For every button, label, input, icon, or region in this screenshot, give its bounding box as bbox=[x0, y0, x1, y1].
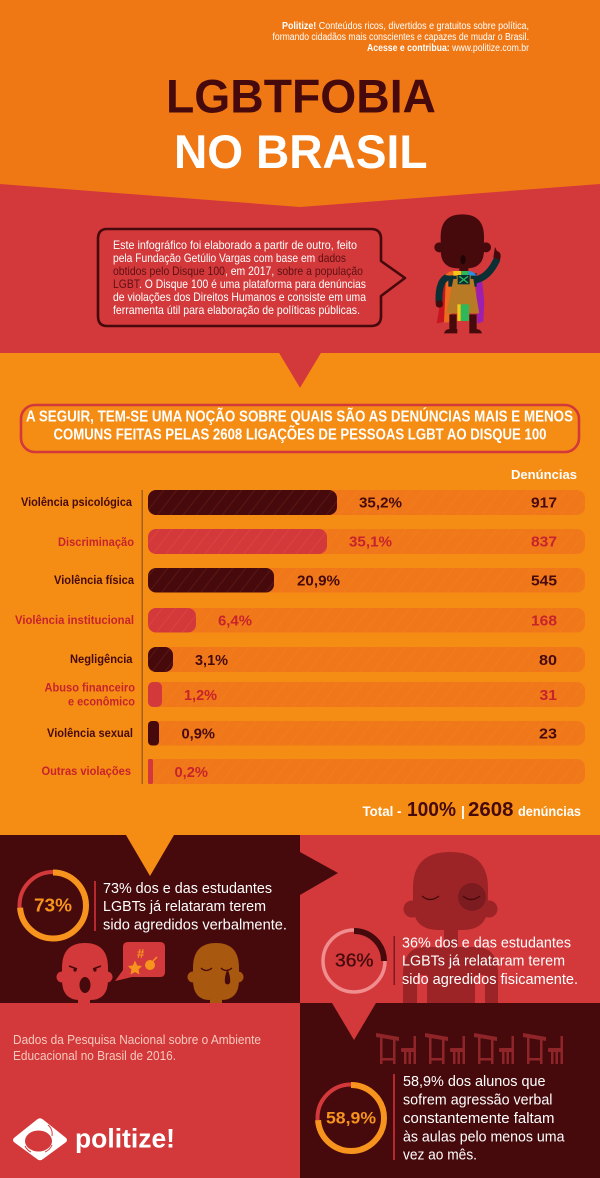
panel: complaints section background bbox=[0, 353, 600, 835]
text: data source: Dados da Pesquisa Nacional sobre o Ambiente bbox=[13, 1032, 261, 1047]
icon: insult speech bubble: # bbox=[137, 946, 145, 961]
donut: 36%: 36% bbox=[335, 950, 374, 970]
callout: intro speech bubble: pela Fundação Getúlio Vargas com base em dados bbox=[113, 251, 346, 265]
row: Violência sexual bbox=[47, 721, 585, 746]
row: Violência física bbox=[54, 568, 585, 592]
title bbox=[166, 70, 436, 178]
total line: 100% bbox=[407, 799, 456, 821]
text: verbal aggression statistic: sido agredidos verbalmente. bbox=[103, 916, 287, 934]
row: Negligência bbox=[70, 647, 585, 672]
panel: physical aggression bbox=[300, 835, 600, 1003]
row: Negligência: 3,1% bbox=[195, 652, 228, 669]
panel: publisher note: formando cidadãos mais conscientes e capazes de mudar o Brasil. bbox=[272, 32, 529, 43]
row: Violência psicológica bbox=[21, 490, 585, 515]
total line: Total - bbox=[362, 803, 402, 819]
text: school absence statistic: constantemente faltam bbox=[403, 1110, 554, 1127]
callout: intro speech bubble: de violações dos Direitos Humanos e consiste em uma bbox=[113, 290, 366, 304]
row: Violência física: 20,9% bbox=[297, 572, 340, 590]
row: Discriminação: Discriminação bbox=[58, 535, 134, 549]
row: Abuso financeiro e econômico: e econômico bbox=[68, 694, 135, 708]
callout: intro speech bubble bbox=[98, 229, 405, 326]
callout: intro speech bubble: ferramenta útil para elaboração de políticas públicas. bbox=[113, 303, 360, 317]
donut: 73%: 73% bbox=[34, 896, 72, 916]
title: NO BRASIL bbox=[174, 125, 428, 178]
row: Discriminação bbox=[58, 529, 585, 554]
row: Discriminação: 837 bbox=[531, 534, 557, 550]
callout: intro speech bubble: Este infográfico foi elaborado a partir de outro, feito bbox=[113, 238, 357, 252]
row: Violência psicológica: 35,2% bbox=[359, 494, 402, 512]
row: Violência institucional: 168 bbox=[531, 612, 557, 630]
panel: introduction bbox=[0, 184, 600, 388]
icon: shouting red face bbox=[56, 943, 112, 1003]
text: data source bbox=[13, 1032, 261, 1063]
donut: 58,9%: 58,9% bbox=[326, 1108, 376, 1128]
row: Negligência: Negligência bbox=[70, 652, 133, 666]
title: LGBTFOBIA bbox=[166, 70, 436, 122]
text: verbal aggression statistic bbox=[103, 880, 287, 934]
icon: politize logo bbox=[13, 1118, 175, 1160]
text: school absence statistic bbox=[403, 1073, 565, 1164]
donut: 36% bbox=[323, 930, 385, 992]
donut: 73% bbox=[20, 872, 86, 939]
panel: publisher note: Acesse e contribua: www.politize.com.br bbox=[367, 43, 530, 54]
panel: school absence bbox=[300, 1003, 600, 1178]
panel: publisher note: Politize! Conteúdos ricos, divertidos e gratuitos sobre política, bbox=[282, 21, 529, 32]
text: school absence statistic: às aulas pelo menos uma bbox=[403, 1128, 565, 1146]
row: Violência institucional: 6,4% bbox=[218, 612, 252, 630]
row: Abuso financeiro e econômico bbox=[44, 680, 585, 708]
row: Violência sexual: Violência sexual bbox=[47, 726, 133, 740]
icon: character with rainbow cape bbox=[434, 214, 501, 333]
row: Violência psicológica: 917 bbox=[531, 494, 557, 512]
row: Violência física: Violência física bbox=[54, 573, 134, 587]
bar chart: complaints by type bbox=[15, 467, 585, 784]
text: verbal aggression statistic: LGBTs já relataram terem bbox=[103, 898, 266, 915]
icon: injured figure silhouette bbox=[403, 852, 498, 1003]
icon: row of school desks and chairs bbox=[376, 1033, 563, 1064]
row: Violência psicológica: Violência psicológica bbox=[21, 495, 132, 509]
panel: source and logo bbox=[0, 1003, 300, 1178]
row: Negligência: 80 bbox=[539, 652, 557, 669]
row: Violência física: 545 bbox=[531, 572, 557, 590]
row: Outras violações bbox=[42, 759, 585, 784]
row: Outras violações: 0,2% bbox=[174, 764, 208, 781]
panel: publisher note bbox=[272, 21, 530, 54]
callout: intro speech bubble: obtidos pelo Disque 100, em 2017, sobre a população bbox=[113, 264, 363, 278]
row: Outras violações: Outras violações bbox=[42, 764, 131, 778]
total line: | bbox=[461, 803, 465, 819]
donut: 58,9% bbox=[318, 1084, 384, 1152]
text: physical aggression statistic: 36% dos e das estudantes bbox=[402, 934, 571, 952]
row: Discriminação: 35,1% bbox=[349, 534, 392, 550]
icon: politize logo: politize! bbox=[75, 1124, 175, 1154]
text: physical aggression statistic: LGBTs já relataram terem bbox=[402, 952, 565, 970]
text: verbal aggression statistic: 73% dos e das estudantes bbox=[103, 880, 272, 897]
text: school absence statistic: sofrem agressão verbal bbox=[403, 1092, 552, 1108]
panel: header background bbox=[0, 0, 600, 208]
row: Violência sexual: 0,9% bbox=[182, 726, 215, 742]
total line bbox=[362, 799, 581, 821]
callout: intro speech bubble: LGBT. O Disque 100 é uma plataforma para denúncias bbox=[113, 277, 366, 291]
column header: Denúncias bbox=[511, 467, 577, 482]
icon: insult speech bubble bbox=[115, 942, 165, 981]
row: Abuso financeiro e econômico: Abuso financeiro bbox=[44, 680, 135, 694]
total line: 2608 bbox=[468, 799, 514, 821]
text: school absence statistic: vez ao mês. bbox=[403, 1146, 477, 1164]
icon: brown face with closed eyes bbox=[188, 943, 244, 1003]
row: Violência institucional: Violência institucional bbox=[15, 613, 134, 627]
row: Abuso financeiro e econômico: 31 bbox=[540, 687, 557, 704]
panel: verbal aggression bbox=[0, 835, 300, 1003]
row: Violência institucional bbox=[15, 608, 585, 632]
row: Violência sexual: 23 bbox=[539, 726, 557, 742]
heading: complaints banner bbox=[21, 405, 579, 452]
text: data source: Educacional no Brasil de 2016. bbox=[13, 1048, 176, 1063]
text: physical aggression statistic: sido agredidos fisicamente. bbox=[402, 971, 578, 988]
text: school absence statistic: 58,9% dos alunos que bbox=[403, 1073, 546, 1090]
text: physical aggression statistic bbox=[402, 934, 578, 988]
total line: denúncias bbox=[518, 803, 581, 819]
row: Abuso financeiro e econômico: 1,2% bbox=[184, 687, 217, 704]
